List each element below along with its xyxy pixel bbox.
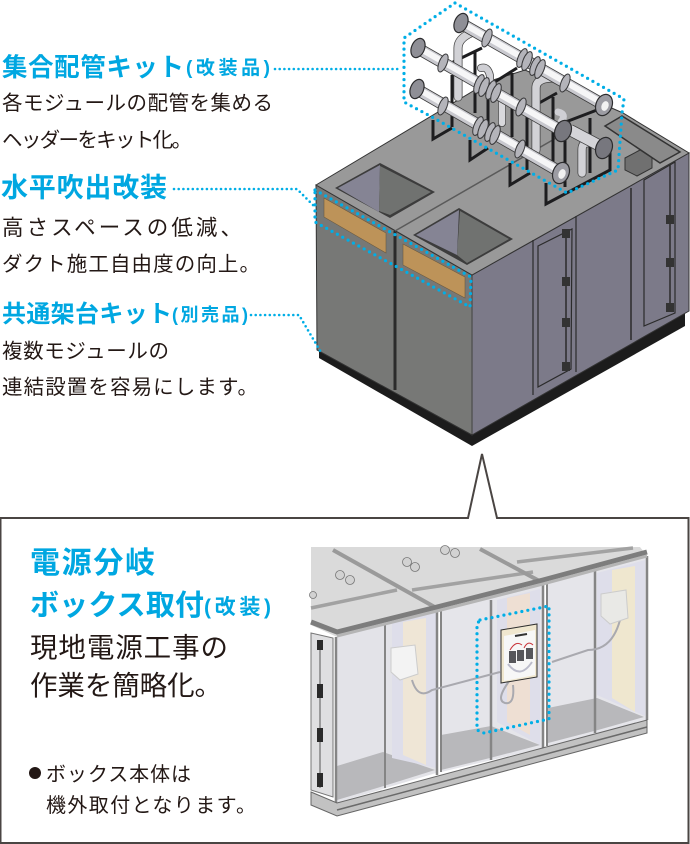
leader: horizontal outlet	[174, 189, 315, 207]
description: 各モジュールの配管を集める	[2, 92, 273, 115]
text block: power branch box	[29, 547, 271, 817]
heading note: (別売品)	[172, 305, 248, 325]
leader: base kit	[251, 315, 322, 354]
text block: base kit	[2, 301, 258, 399]
module 3 panel	[548, 556, 647, 746]
illustration: header pipe kit	[407, 11, 616, 204]
text block: horizontal outlet	[1, 173, 260, 276]
side terminal box 1	[391, 645, 418, 680]
base rail	[311, 720, 647, 816]
illustration: power box installed in modules	[310, 546, 647, 816]
side terminal box 2	[601, 590, 628, 624]
vertical elbows	[458, 32, 587, 173]
orange panel 1	[324, 198, 386, 253]
duct opening 1	[335, 163, 435, 218]
door outline	[319, 640, 321, 788]
roof flanges	[310, 546, 460, 598]
callout outline: branch box	[477, 606, 549, 733]
panel posts	[336, 556, 647, 803]
leader: pipe kit	[275, 68, 398, 70]
door latches	[562, 215, 674, 371]
connecting cables	[412, 620, 620, 703]
illustration: air handling unit modules	[316, 70, 689, 446]
door latches	[317, 640, 323, 787]
text block: horizontal outlet: ダクト施工自由度の向上。	[2, 253, 260, 276]
roof rear rails	[311, 548, 633, 608]
heading: 電源分岐	[30, 547, 155, 580]
pipe A rear	[462, 23, 604, 105]
callout outline: pipe kit	[404, 3, 624, 193]
top surface	[316, 70, 689, 275]
end flanges	[407, 11, 616, 186]
rear top pocket	[605, 116, 680, 176]
roof panels	[311, 547, 647, 637]
callout frame with pointer	[0, 454, 688, 843]
duct opening 2	[413, 208, 513, 265]
right face	[472, 153, 689, 435]
corner post	[471, 276, 473, 434]
floors	[337, 698, 644, 800]
pipe B middle	[419, 48, 562, 131]
heading note: (改装品)	[186, 57, 270, 79]
left face	[316, 185, 472, 435]
note: ボックス本体は	[46, 763, 191, 786]
module 1 panel	[336, 612, 436, 803]
heading: 共通架台キット	[2, 301, 172, 328]
text block: pipe kit: ヘッダーをキット化。	[2, 129, 192, 152]
cross beams	[333, 549, 545, 610]
text block: power branch box: 作業を簡略化。	[30, 670, 222, 701]
heading note: (改装)	[204, 596, 271, 619]
description: 複数モジュールの	[2, 340, 169, 363]
pipe C front	[418, 89, 562, 173]
inner side walls	[392, 560, 645, 768]
text block: power branch box: ボックス取付	[30, 589, 204, 622]
callout outline: horizontal outlet	[315, 190, 471, 307]
base rail line	[337, 727, 647, 810]
heading: 集合配管キット	[2, 54, 184, 82]
heading: 水平吹出改装	[1, 173, 167, 203]
orange panel 2	[403, 244, 465, 298]
description: 高さスペースの低減、	[2, 216, 242, 240]
mid flanges	[436, 28, 572, 159]
module divider	[394, 231, 396, 390]
module 2 panel	[441, 585, 543, 772]
side access door	[533, 162, 675, 395]
branch box	[501, 624, 537, 683]
top front beam	[311, 552, 647, 636]
text block: power branch box: 機外取付となります。	[46, 794, 256, 817]
text block: pipe kit	[2, 54, 273, 152]
base frame	[319, 313, 685, 446]
pipe D rear	[570, 130, 606, 149]
note bullet	[29, 767, 41, 779]
support frames	[433, 48, 610, 204]
text block: base kit: 連結設置を容易にします。	[2, 376, 258, 399]
description: 現地電源工事の	[30, 632, 228, 663]
left door module	[311, 633, 333, 797]
